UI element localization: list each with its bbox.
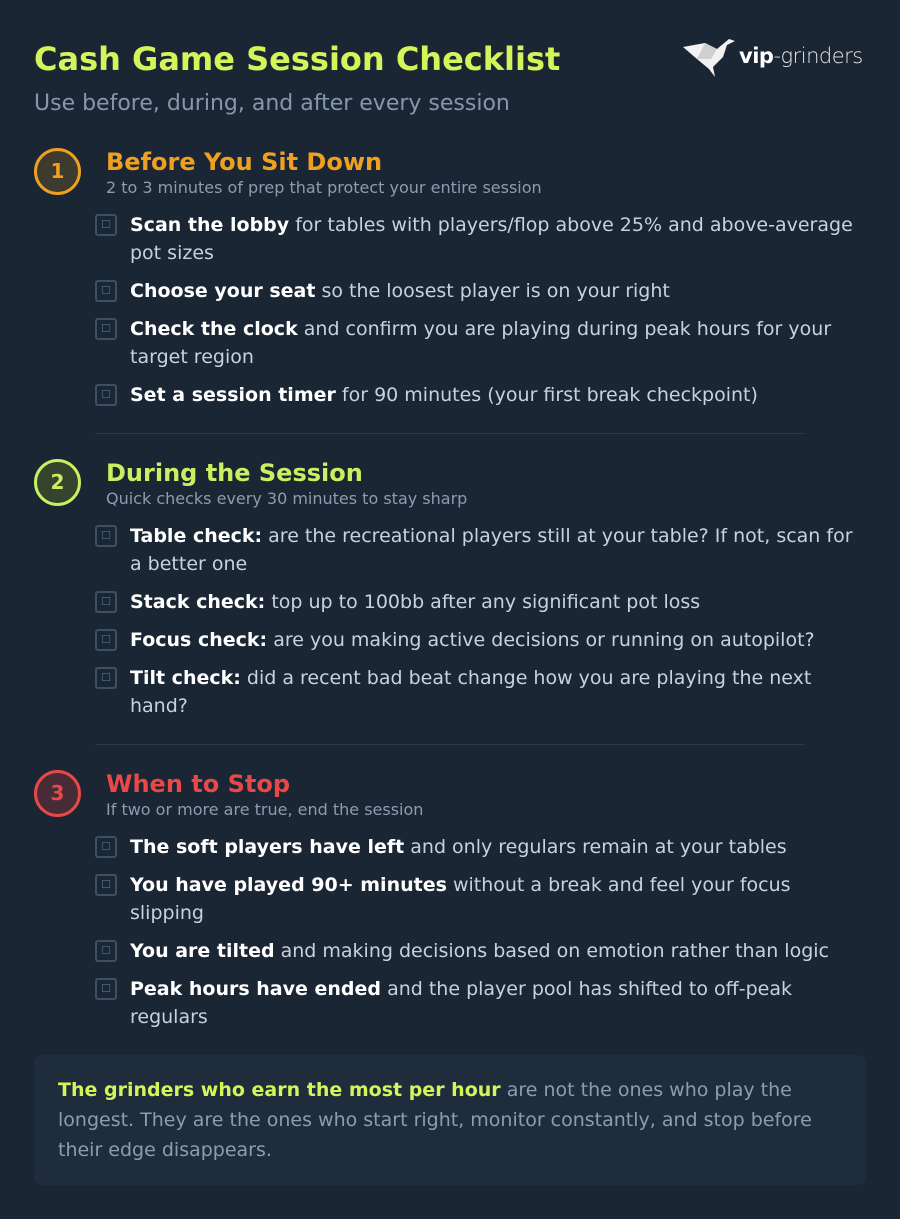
- item 2.1: ☐: [101, 529, 111, 542]
- section 2 subheading: Quick checks every 30 minutes to stay sharp: [106, 489, 467, 508]
- item 3.2: You have played 90+ minutes without a break and feel your focus slipping: [130, 874, 791, 924]
- item 3.1: The soft players have left and only regulars remain at your tables: [130, 836, 787, 858]
- item 1.2: ☐: [101, 284, 111, 297]
- item 3.1: ☐: [101, 840, 111, 853]
- item 1.2: Choose your seat so the loosest player is on your right: [130, 280, 670, 302]
- item 2.3: Focus check: are you making active decisions or running on autopilot?: [130, 629, 815, 651]
- item 3.3: ☐: [101, 944, 111, 957]
- logo: vip-grinders: [739, 44, 863, 68]
- title: Cash Game Session Checklist: [34, 40, 560, 78]
- section 1 circle: 1: [51, 159, 64, 183]
- item 3.2: ☐: [101, 878, 111, 891]
- section 1 subheading: 2 to 3 minutes of prep that protect your entire session: [106, 178, 542, 197]
- subtitle: Use before, during, and after every session: [34, 91, 510, 116]
- section 2 circle: 2: [51, 470, 64, 494]
- section 3 circle: 3: [51, 781, 64, 805]
- item 1.1: Scan the lobby for tables with players/flop above 25% and above-average pot sizes: [130, 214, 853, 264]
- section 1 heading: Before You Sit Down: [106, 148, 382, 176]
- section 3 heading: When to Stop: [106, 770, 290, 798]
- item 2.4: Tilt check: did a recent bad beat change how you are playing the next hand?: [130, 667, 811, 717]
- item 1.3: Check the clock and confirm you are playing during peak hours for your target region: [130, 318, 831, 368]
- item 2.4: ☐: [101, 671, 111, 684]
- section 1 circle: [34, 148, 81, 195]
- item 2.2: Stack check: top up to 100bb after any significant pot loss: [130, 591, 700, 613]
- section 2 circle: [34, 459, 81, 506]
- section 2 heading: During the Session: [106, 459, 363, 487]
- item 1.3: ☐: [101, 322, 111, 335]
- item 2.2: ☐: [101, 595, 111, 608]
- section 3 circle: [34, 770, 81, 817]
- logo: [683, 39, 863, 77]
- item 1.4: Set a session timer for 90 minutes (your first break checkpoint): [130, 384, 758, 406]
- item 1.4: ☐: [101, 388, 111, 401]
- item 2.3: ☐: [101, 633, 111, 646]
- item 3.4: Peak hours have ended and the player pool has shifted to off-peak regulars: [130, 978, 792, 1028]
- section 3 subheading: If two or more are true, end the session: [106, 800, 423, 819]
- callout: The grinders who earn the most per hour are not the ones who play the longest. They are the ones who start right, monitor constantly, and stop before their edge disappears.: [58, 1079, 812, 1161]
- item 3.4: ☐: [101, 982, 111, 995]
- item 1.1: ☐: [101, 218, 111, 231]
- callout: [34, 1055, 866, 1185]
- item 2.1: Table check: are the recreational players still at your table? If not, scan for a better one: [130, 525, 853, 575]
- item 3.3: You are tilted and making decisions based on emotion rather than logic: [130, 940, 829, 962]
